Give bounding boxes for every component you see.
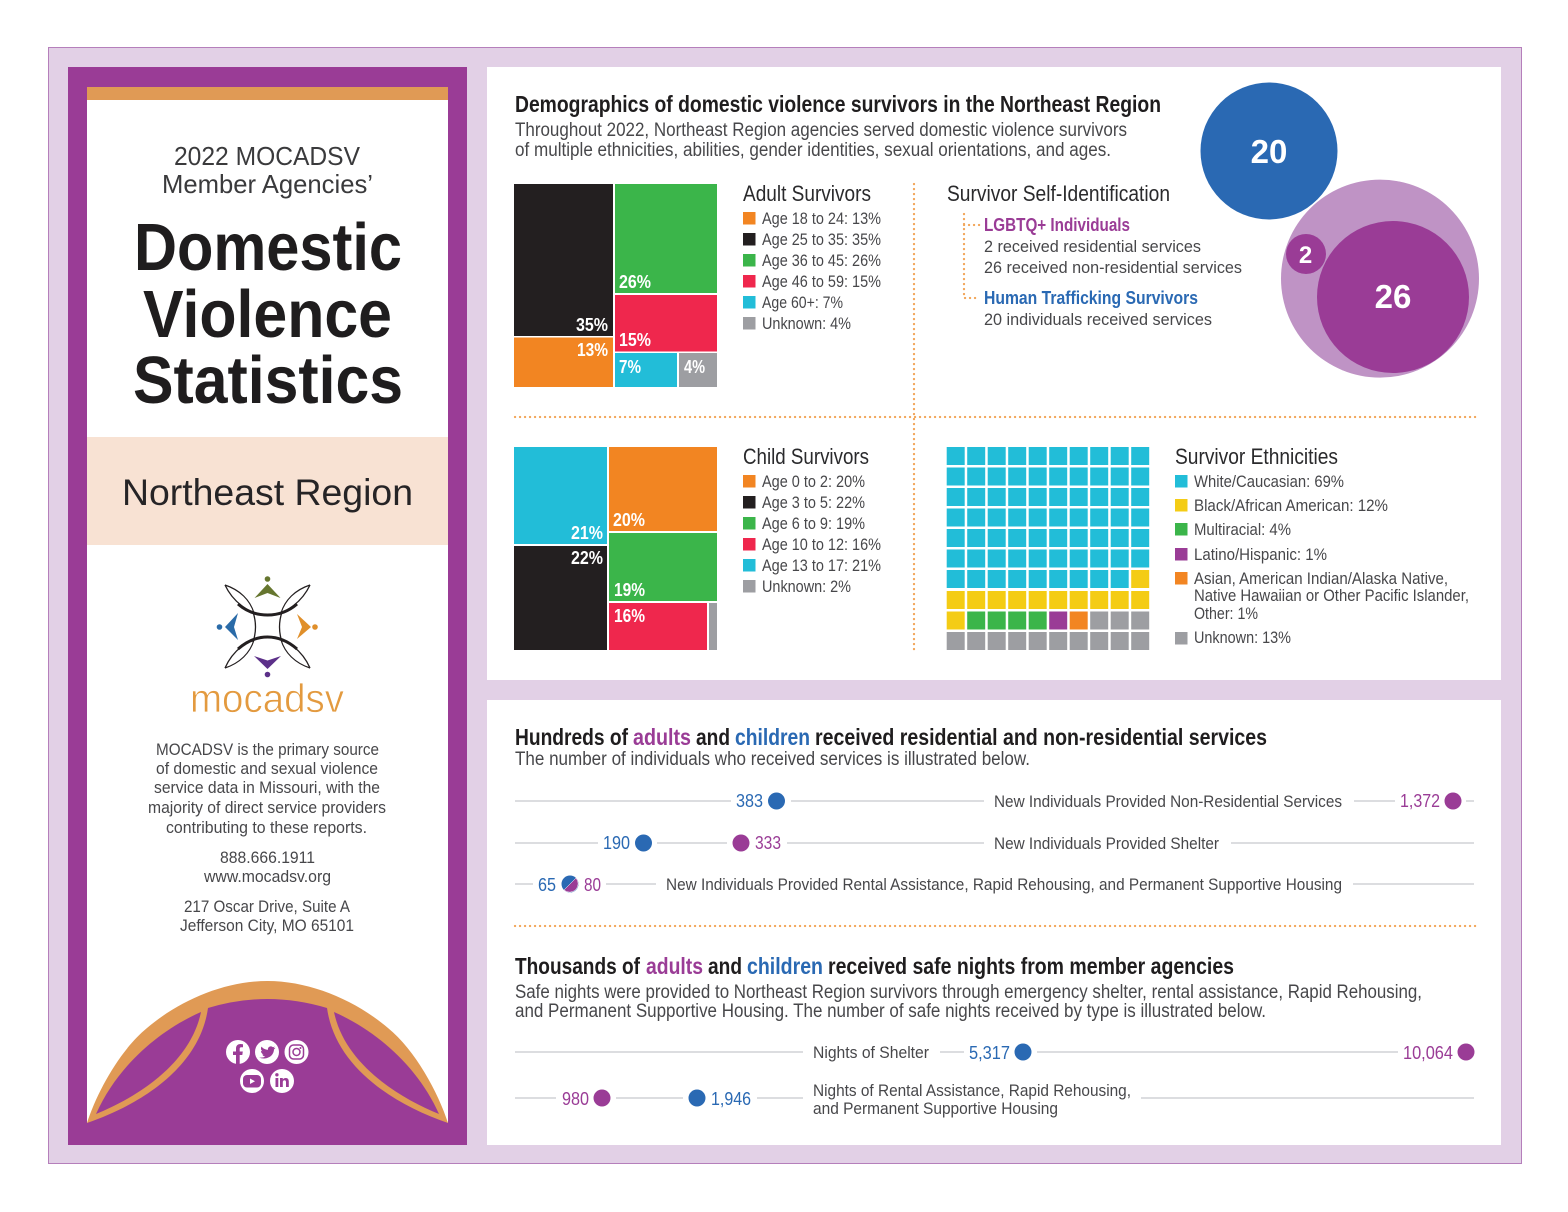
about text: of domestic and sexual violence [156,759,378,778]
title: Statistics [133,343,403,418]
heading: services: children [735,724,810,750]
legend: adult survivors: Unknown: 4% [762,314,851,333]
treemap: adult survivors [514,184,717,387]
icon: mocadsv logo [217,576,318,677]
panel: demographics [487,67,1501,680]
legend: adult survivors: Adult Survivors [743,181,871,206]
heading: services: received residential and non-residential services [815,724,1267,750]
heading: safe nights: and [708,953,742,979]
row: shelter: 333 [755,833,781,853]
contact text: 888.666.1911 [220,848,315,867]
row: rental assistance: New Individuals Provided Rental Assistance, Rapid Rehousing, and Permanent Supportive Housing [666,875,1342,894]
legend: child survivors: Age 0 to 2: 20% [762,472,865,491]
treemap: adult survivors: 15% [619,330,651,350]
legend: adult survivors [743,181,881,333]
block: survivor self-identification [947,181,1242,329]
about text: majority of direct service providers [148,798,386,817]
dome footer [87,981,448,1145]
bubble: LGBTQ+ total: 26 [1375,278,1411,315]
block: survivor self-identification: 20 individuals received services [984,310,1212,329]
logo wordmark: mocadsv [190,677,344,721]
legend: survivor ethnicities [1175,444,1469,647]
intro heading [162,141,373,199]
legend: child survivors: Age 3 to 5: 22% [762,493,865,512]
heading: services [515,724,1267,750]
region band: Northeast Region [122,472,413,513]
row: nights of shelter: Nights of Shelter [813,1043,929,1062]
row: non-residential services [515,791,1474,811]
panel: left sidebar [68,67,467,1145]
treemap: child survivors: 16% [614,606,645,626]
contact text [180,848,354,935]
icon: twitter [255,1040,279,1064]
legend: child survivors: Child Survivors [743,444,869,469]
contact text: 217 Oscar Drive, Suite A [184,897,351,916]
waffle chart: survivor ethnicities [947,447,1149,650]
legend: survivor ethnicities: Native Hawaiian or Other Pacific Islander, [1194,586,1469,605]
row: nights of rental assistance: Nights of Rental Assistance, Rapid Rehousing, [813,1081,1131,1100]
legend: survivor ethnicities: Asian, American Indian/Alaska Native, [1194,569,1448,588]
row: shelter [515,833,1474,853]
legend: child survivors: Age 10 to 12: 16% [762,535,881,554]
icon: facebook [226,1040,250,1064]
legend: child survivors [743,444,881,596]
legend: child survivors: Age 13 to 17: 21% [762,556,881,575]
safe nights description [515,982,1422,1022]
legend: survivor ethnicities: Other: 1% [1194,604,1258,623]
heading: services: Hundreds of [515,724,628,750]
icon: linkedin [270,1069,294,1093]
safe nights description: Safe nights were provided to Northeast Region survivors through emergency shelter, rental assistance, Rapid Rehousing, [515,982,1422,1003]
row: non-residential services: New Individuals Provided Non-Residential Services [994,792,1342,811]
treemap: adult survivors: 4% [684,357,705,377]
heading: safe nights: received safe nights from member agencies [828,953,1234,979]
legend: child survivors: Unknown: 2% [762,577,851,596]
row: rental assistance: 80 [584,875,601,895]
treemap: child survivors [514,447,717,650]
row: rental assistance: 65 [538,875,556,895]
treemap: child survivors: 21% [571,523,603,543]
block: survivor self-identification: LGBTQ+ Individuals [984,214,1130,235]
row: nights of shelter: 10,064 [1403,1043,1453,1063]
legend: adult survivors: Age 46 to 59: 15% [762,272,881,291]
heading: safe nights [515,953,1234,979]
legend: adult survivors: Age 60+: 7% [762,293,843,312]
legend: adult survivors: Age 18 to 24: 13% [762,209,881,228]
legend: survivor ethnicities: Survivor Ethnicities [1175,444,1338,469]
treemap: adult survivors: 35% [576,315,608,335]
row: shelter: 190 [603,833,630,853]
row: nights of shelter [515,1043,1474,1063]
block: survivor self-identification: 26 received non-residential services [984,258,1242,277]
row: shelter: New Individuals Provided Shelter [994,834,1219,853]
about text: contributing to these reports. [166,818,367,837]
panel: services and safe nights [487,700,1501,1145]
legend: survivor ethnicities: Black/African American: 12% [1194,496,1388,515]
treemap: child survivors: 20% [613,510,645,530]
heading: safe nights: adults [646,953,703,979]
bubble: human trafficking 20 [1200,82,1338,220]
contact text: www.mocadsv.org [203,867,331,886]
intro heading: 2022 MOCADSV [174,141,361,171]
legend: adult survivors: Age 25 to 35: 35% [762,230,881,249]
heading: safe nights: Thousands of [515,953,640,979]
legend: survivor ethnicities: White/Caucasian: 69% [1194,472,1344,491]
contact text: Jefferson City, MO 65101 [180,916,354,935]
treemap: adult survivors: 7% [619,357,641,377]
legend: survivor ethnicities: Unknown: 13% [1194,628,1291,647]
row: nights of shelter: 5,317 [969,1043,1010,1063]
block: survivor self-identification: Human Trafficking Survivors [984,287,1198,308]
title [133,210,403,418]
heading: safe nights: children [747,953,823,979]
intro heading: Member Agencies’ [162,169,373,199]
treemap: adult survivors: 26% [619,272,651,292]
legend: adult survivors: Age 36 to 45: 26% [762,251,881,270]
block: survivor self-identification: Survivor Self-Identification [947,181,1170,206]
row: nights of rental assistance: 1,946 [711,1089,751,1109]
row: non-residential services: 383 [736,791,763,811]
bubble: LGBTQ+ total [1281,180,1479,378]
icon: youtube [240,1069,264,1093]
legend: survivor ethnicities: Multiracial: 4% [1194,520,1291,539]
services subheading: The number of individuals who received services is illustrated below. [515,749,1030,770]
intro text: Throughout 2022, Northeast Region agencies served domestic violence survivors [515,120,1127,141]
treemap: child survivors: 22% [571,548,603,568]
treemap: child survivors: 19% [614,580,645,600]
title: Violence [143,277,392,352]
row: nights of rental assistance: 980 [562,1089,589,1109]
safe nights description: and Permanent Supportive Housing. The number of safe nights received by type is illustrated below. [515,1001,1266,1022]
about text [148,740,386,837]
heading: demographics: Demographics of domestic violence survivors in the Northeast Region [515,91,1161,117]
about text: MOCADSV is the primary source [156,740,379,759]
row: nights of rental assistance [515,1081,1474,1118]
intro text: of multiple ethnicities, abilities, gender identities, sexual orientations, and ages. [515,140,1111,161]
row: non-residential services: 1,372 [1400,791,1440,811]
bubble: human trafficking 20: 20 [1251,133,1287,170]
heading: services: adults [633,724,691,750]
icon: instagram [284,1040,308,1064]
legend: child survivors: Age 6 to 9: 19% [762,514,865,533]
region band [87,437,448,545]
title: Domestic [134,210,402,285]
bubble: LGBTQ+ total: 2 [1299,242,1312,269]
row: nights of rental assistance: and Permanent Supportive Housing [813,1099,1058,1118]
treemap: adult survivors: 13% [577,340,608,360]
intro text [515,120,1127,161]
about text: service data in Missouri, with the [154,778,380,797]
legend: survivor ethnicities: Latino/Hispanic: 1% [1194,545,1327,564]
block: survivor self-identification: 2 received residential services [984,237,1201,256]
heading: services: and [696,724,730,750]
